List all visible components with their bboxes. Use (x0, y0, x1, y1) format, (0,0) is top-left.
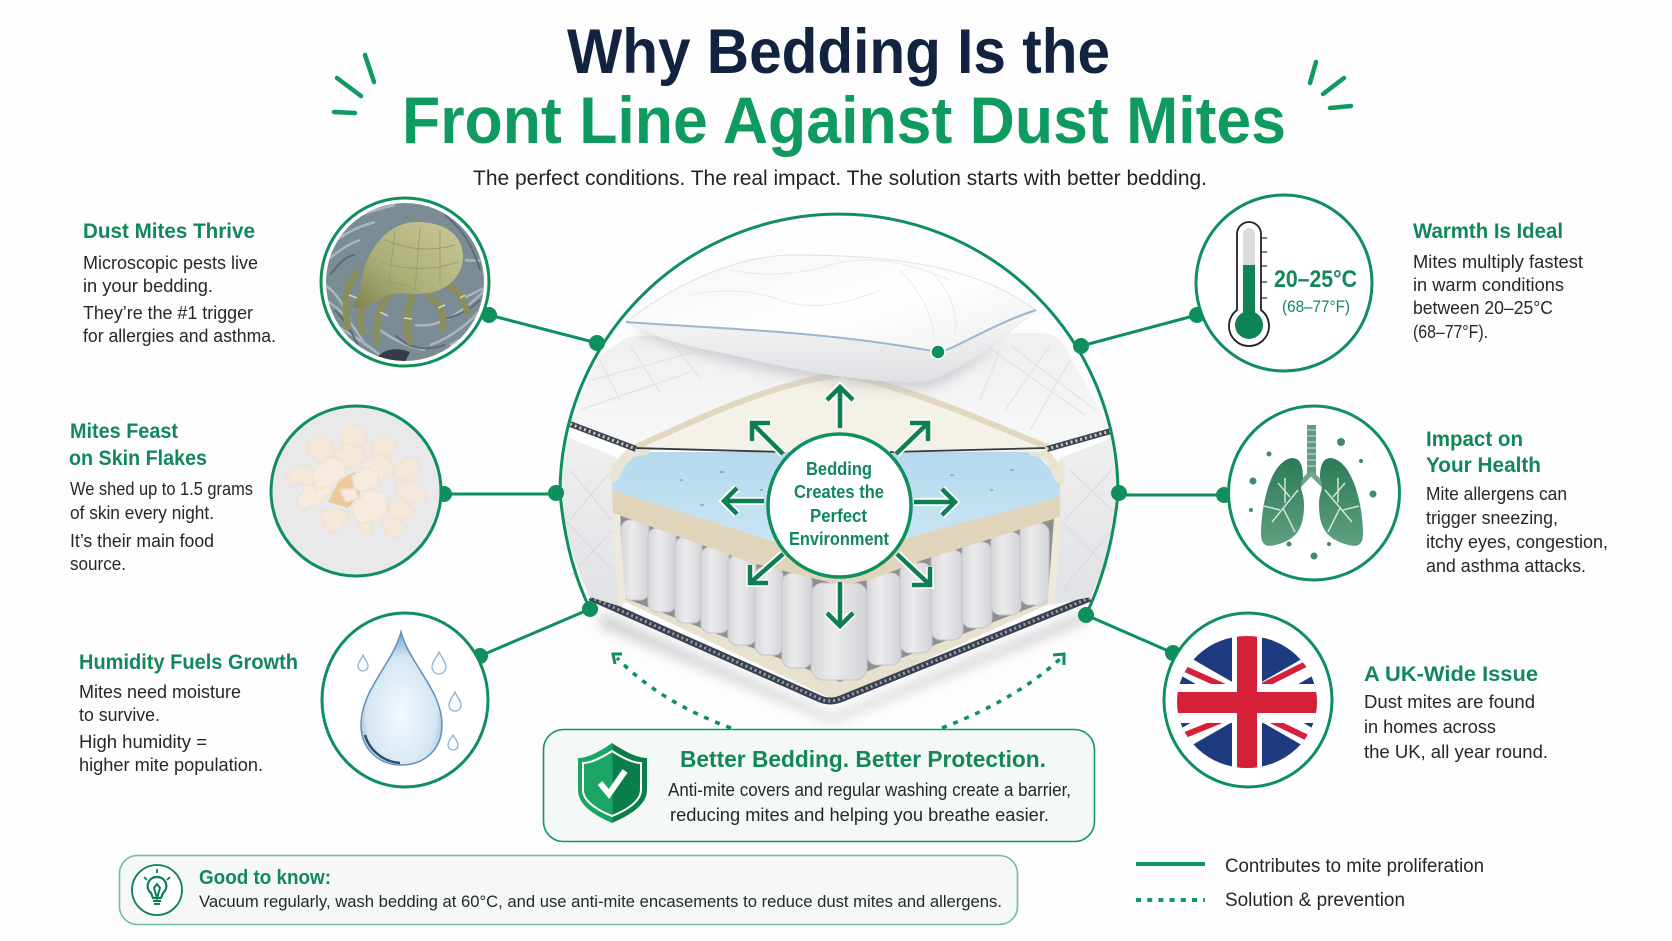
body text (1413, 252, 1583, 342)
body text (1364, 692, 1548, 762)
body text: We shed up to 1.5 grams (70, 479, 253, 499)
allergen particles (1249, 438, 1376, 560)
body text: source. (70, 554, 126, 574)
callout line 1: Anti-mite covers and regular washing create a barrier, (668, 780, 1071, 800)
heading: Humidity Fuels Growth (79, 651, 298, 674)
title (402, 17, 1286, 157)
beige comfort layer (612, 488, 1060, 585)
pillow shadow (640, 325, 1000, 389)
decorative rays right (1310, 62, 1351, 108)
solution dashed arrows (613, 654, 1064, 728)
legend (1136, 856, 1484, 911)
right side panel (1050, 438, 1118, 605)
body text: Mites need moisture (79, 682, 241, 702)
body text: higher mite population. (79, 755, 263, 775)
legend dotted label: Solution & prevention (1225, 890, 1405, 911)
large environment circle (560, 214, 1118, 615)
pillow (626, 255, 1036, 381)
icon: shield (578, 743, 647, 823)
heading: Warmth Is Ideal (1413, 220, 1563, 243)
body text: of skin every night. (70, 503, 214, 523)
body text: (68–77°F). (1413, 322, 1488, 342)
title line 2: Front Line Against Dust Mites (402, 83, 1286, 157)
icon: lungs (1228, 406, 1400, 580)
mattress illustration (561, 255, 1118, 722)
mite leg joints (349, 295, 465, 319)
blue gel foam (612, 452, 1060, 563)
rope twist (590, 597, 1090, 701)
dark gap below flap (632, 448, 1045, 452)
pocket springs (621, 520, 1049, 680)
cream frame (612, 460, 1062, 604)
body text: Vacuum regularly, wash bedding at 60°C, and use anti-mite encasements to reduce dust mites and allergens. (199, 892, 1002, 911)
icon: skin flakes (271, 406, 441, 576)
heading: on Skin Flakes (69, 447, 207, 470)
panel: humidity (79, 651, 298, 775)
heading: Mites Feast (70, 420, 178, 443)
spring backdrop (620, 505, 1055, 682)
pillow quilting (690, 260, 956, 340)
panel: warmth (1413, 220, 1583, 342)
icon: water drop (322, 613, 488, 787)
center text (789, 459, 889, 549)
icon: lightbulb (132, 865, 182, 915)
mite body (353, 222, 463, 309)
body text: trigger sneezing, (1426, 508, 1558, 528)
legend solid label: Contributes to mite proliferation (1225, 856, 1484, 877)
icon: thermometer (1196, 195, 1372, 371)
center text: Bedding (806, 459, 872, 479)
body text: and asthma attacks. (1426, 556, 1586, 576)
quilted top surface (570, 333, 1111, 448)
rolled edges (614, 450, 1060, 478)
panel: better protection callout (544, 730, 1094, 842)
subtitle: The perfect conditions. The real impact. The solution starts with better bedding. (473, 167, 1207, 190)
mite legs (346, 273, 467, 343)
heading (1426, 428, 1541, 477)
radiating arrows (724, 387, 955, 626)
body text: High humidity = (79, 732, 207, 752)
left side panel (561, 436, 622, 607)
side quilting (565, 470, 1112, 590)
body text: in your bedding. (83, 276, 213, 296)
body text: the UK, all year round. (1364, 742, 1548, 762)
body text: between 20–25°C (1413, 298, 1553, 318)
pillow body (626, 255, 1036, 381)
fahrenheit label: (68–77°F) (1282, 297, 1350, 316)
pillow lower band (626, 310, 1036, 381)
edge piping twist (570, 424, 1111, 449)
temperature label: 20–25°C (1274, 266, 1357, 293)
body text (79, 682, 263, 775)
panel: health impact (1426, 428, 1608, 576)
body text: to survive. (79, 705, 160, 725)
icon: dust mite (320, 195, 490, 370)
center circle (768, 434, 911, 577)
body text: Dust mites are found (1364, 692, 1535, 712)
cream base (600, 500, 1080, 698)
flap beige band (636, 374, 1047, 447)
foam flap (636, 373, 1047, 452)
heading: Dust Mites Thrive (83, 220, 255, 243)
orange inner flakes (328, 472, 360, 508)
foam speckles (680, 470, 1014, 505)
body text: in warm conditions (1413, 275, 1564, 295)
mattress shadow (600, 612, 1085, 722)
body text: Mites multiply fastest (1413, 252, 1583, 272)
heading: Impact on (1426, 428, 1523, 451)
body text: They’re the #1 trigger (83, 303, 253, 323)
body text: It’s their main food (70, 531, 214, 551)
connector lines (444, 315, 1224, 656)
quilting lines (580, 340, 1095, 430)
body text (1426, 484, 1608, 576)
icon: union flag (1160, 613, 1334, 787)
body text: Microscopic pests live (83, 253, 258, 273)
callout line 2: reducing mites and helping you breathe easier. (670, 805, 1049, 825)
heading: A UK-Wide Issue (1364, 663, 1538, 686)
heading: Good to know: (199, 867, 331, 889)
panel: good to know (120, 856, 1018, 924)
edge piping (570, 424, 1111, 449)
body text (70, 479, 253, 574)
body text: in homes across (1364, 717, 1496, 737)
heading: Your Health (1426, 454, 1541, 477)
center text: Perfect (810, 506, 867, 526)
body text: itchy eyes, congestion, (1426, 532, 1608, 552)
legend solid line (1136, 862, 1205, 866)
decorative rays left (334, 55, 374, 113)
connector dots (436, 307, 1232, 664)
center text: Creates the (794, 482, 884, 502)
heading (69, 420, 207, 470)
title line 1: Why Bedding Is the (567, 17, 1110, 87)
small droplets (358, 652, 461, 750)
legend dotted line (1136, 898, 1205, 902)
body text: for allergies and asthma. (83, 326, 276, 346)
rope piping (590, 597, 1090, 701)
panel: UK-wide issue (1364, 663, 1548, 762)
callout heading: Better Bedding. Better Protection. (680, 746, 1046, 772)
body text: Mite allergens can (1426, 484, 1567, 504)
pillow seam (626, 310, 1036, 352)
center text: Environment (789, 529, 889, 549)
body text (83, 253, 276, 346)
panel: dust mites thrive (83, 220, 276, 346)
panel: skin flakes (69, 420, 253, 574)
